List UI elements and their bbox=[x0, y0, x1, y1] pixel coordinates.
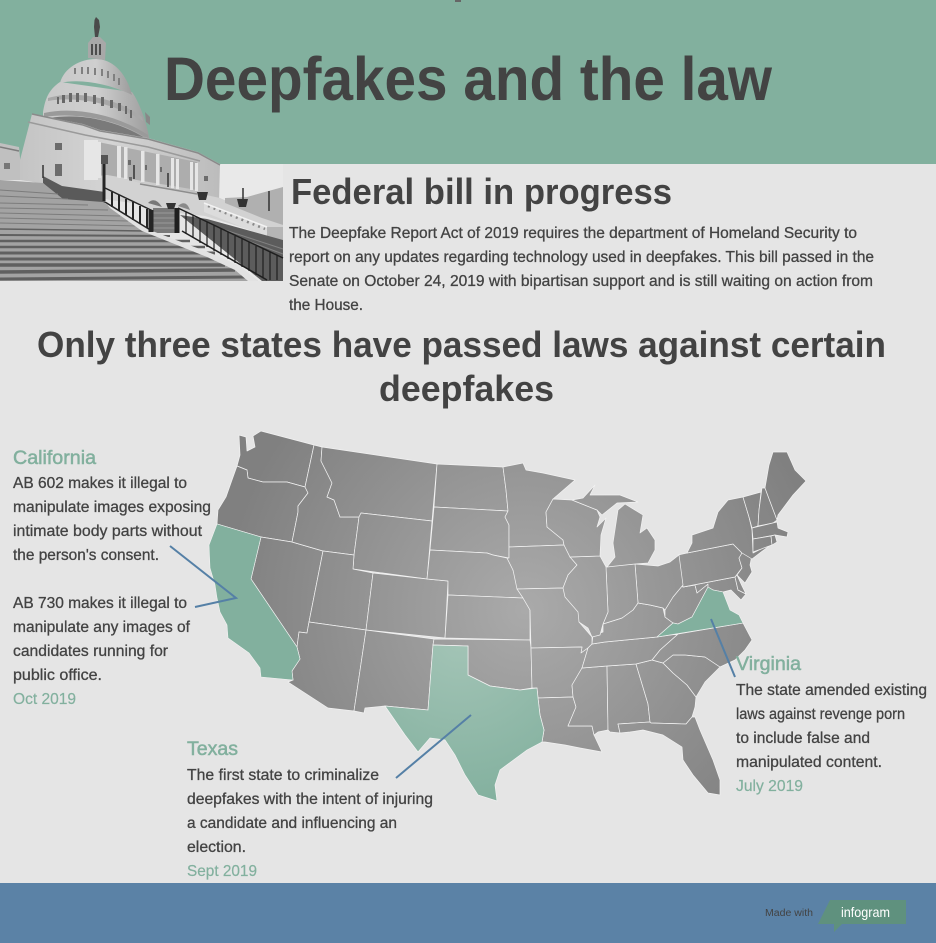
California text: public office. bbox=[13, 667, 102, 684]
Texas date: Sept 2019 bbox=[187, 863, 257, 880]
OK bbox=[433, 639, 532, 690]
IL bbox=[563, 556, 608, 637]
lamp posts bbox=[43, 165, 269, 211]
top edge mark bbox=[455, 0, 461, 2]
Virginia date: July 2019 bbox=[736, 778, 803, 795]
callout: California bbox=[13, 448, 211, 708]
left wing bbox=[0, 143, 22, 180]
sky patch bbox=[220, 164, 283, 281]
VT bbox=[743, 492, 761, 528]
California text: manipulate images exposing bbox=[13, 499, 211, 516]
colonnade band bbox=[50, 116, 143, 143]
Virginia highlight bbox=[657, 587, 743, 637]
LA bbox=[538, 697, 602, 752]
CO bbox=[366, 573, 448, 638]
text block: federal bill description bbox=[289, 225, 874, 314]
AR bbox=[531, 647, 588, 698]
columns bbox=[84, 140, 198, 191]
MI lower bbox=[607, 504, 655, 567]
windows bbox=[55, 143, 208, 182]
text block: federal bill description: report on any updates regarding technology used in deepfakes. This bill passed in the bbox=[289, 249, 874, 266]
callout: Texas bbox=[187, 739, 433, 880]
text block: federal bill description: Senate on October 24, 2019 with bipartisan support and is still waiting on action from bbox=[289, 273, 873, 290]
title: Deepfakes and the law bbox=[164, 45, 773, 113]
California highlight bbox=[209, 524, 300, 680]
NJ bbox=[737, 553, 752, 583]
arches bbox=[148, 200, 162, 207]
footer credit bbox=[765, 900, 906, 932]
MO bbox=[517, 588, 592, 653]
NY bbox=[687, 497, 773, 559]
KS bbox=[445, 595, 530, 640]
Virginia text: manipulated content. bbox=[736, 754, 882, 771]
TN bbox=[582, 634, 678, 668]
text block: federal bill description: the House. bbox=[289, 297, 363, 314]
Virginia name: Virginia bbox=[736, 654, 801, 675]
dome cap bbox=[60, 59, 132, 95]
NM bbox=[354, 630, 434, 713]
AL bbox=[607, 664, 650, 733]
right balustrade bbox=[204, 203, 267, 237]
heading: three states: deepfakes bbox=[379, 368, 554, 409]
California text: intimate body parts without bbox=[13, 523, 203, 540]
ME bbox=[765, 452, 806, 520]
infogram wordmark: infogram bbox=[841, 904, 890, 920]
snow on steps bbox=[106, 203, 258, 281]
California name: California bbox=[13, 448, 96, 469]
Virginia text bbox=[736, 682, 927, 771]
Texas text: The first state to criminalize bbox=[187, 767, 379, 784]
side staircase bbox=[180, 215, 283, 281]
left dark stair bbox=[43, 176, 105, 203]
California text: AB 602 makes it illegal to bbox=[13, 475, 187, 492]
heading: three states bbox=[37, 324, 886, 409]
California text: AB 730 makes it illegal to bbox=[13, 595, 187, 612]
GA bbox=[636, 660, 696, 724]
arrow: Texas bbox=[396, 715, 471, 778]
PA bbox=[678, 544, 742, 587]
main steps bbox=[0, 180, 258, 281]
ID bbox=[292, 445, 359, 555]
MI upper bbox=[572, 485, 638, 515]
WI bbox=[546, 499, 606, 557]
centre railing bbox=[104, 158, 153, 232]
header band bbox=[0, 0, 936, 164]
Texas text: deepfakes with the intent of injuring bbox=[187, 791, 433, 808]
text block: federal bill description: The Deepfake Report Act of 2019 requires the department of Homeland Security to bbox=[289, 225, 857, 242]
NC bbox=[652, 623, 752, 667]
portico shade bbox=[98, 142, 197, 190]
FL bbox=[618, 717, 720, 795]
Texas text: election. bbox=[187, 839, 246, 856]
California text bbox=[13, 475, 211, 684]
California date: Oct 2019 bbox=[13, 691, 76, 708]
MN bbox=[503, 463, 575, 547]
RI bbox=[771, 535, 777, 545]
infogram badge bbox=[818, 900, 906, 932]
UT bbox=[309, 551, 373, 630]
MT bbox=[321, 447, 437, 521]
WA bbox=[237, 431, 314, 487]
lamp bbox=[101, 155, 108, 164]
Virginia text: to include false and bbox=[736, 730, 870, 747]
photo: US Capitol bbox=[0, 17, 283, 281]
OH bbox=[635, 555, 683, 610]
heading: three states: Only three states have passed laws against certain bbox=[37, 324, 886, 365]
Texas text: a candidate and influencing an bbox=[187, 815, 397, 832]
background building bbox=[225, 187, 283, 225]
flag bbox=[145, 112, 150, 125]
Virginia text: laws against revenge porn bbox=[736, 706, 905, 723]
statue bbox=[94, 17, 100, 37]
CT bbox=[753, 536, 772, 552]
DE bbox=[735, 575, 746, 594]
SC bbox=[663, 655, 720, 697]
dome drum bbox=[43, 82, 150, 150]
MD bbox=[683, 577, 746, 600]
lantern bbox=[88, 37, 106, 60]
centre flight bbox=[153, 208, 176, 233]
arrow: California bbox=[170, 546, 236, 607]
NE bbox=[427, 550, 523, 598]
Texas highlight bbox=[385, 645, 544, 801]
ND bbox=[434, 464, 508, 511]
map of the United States bbox=[217, 431, 806, 795]
main building bbox=[20, 114, 220, 212]
MS bbox=[568, 666, 608, 735]
California text: candidates running for bbox=[13, 643, 169, 660]
MA bbox=[752, 522, 788, 539]
NH bbox=[758, 488, 777, 526]
urns bbox=[166, 192, 248, 209]
California text: the person's consent. bbox=[13, 547, 159, 564]
NV bbox=[251, 537, 323, 647]
Texas text bbox=[187, 767, 433, 856]
AZ bbox=[288, 622, 366, 711]
footer band bbox=[0, 883, 936, 943]
Virginia text: The state amended existing bbox=[736, 682, 927, 699]
SD bbox=[430, 507, 509, 558]
Texas name: Texas bbox=[187, 739, 238, 760]
arrow: Virginia bbox=[711, 619, 735, 677]
heading: Federal bill in progress: Federal bill in progress bbox=[291, 171, 672, 212]
callout: Virginia bbox=[736, 654, 927, 795]
terrace bbox=[105, 175, 283, 240]
OR bbox=[217, 466, 308, 542]
made with label: Made with bbox=[765, 908, 813, 919]
drum windows bbox=[57, 93, 132, 118]
right railing bbox=[177, 208, 283, 280]
KY bbox=[592, 603, 673, 644]
WV bbox=[665, 584, 708, 624]
WY bbox=[353, 513, 432, 579]
California text: manipulate any images of bbox=[13, 619, 191, 636]
IN bbox=[603, 564, 638, 624]
IA bbox=[507, 545, 577, 589]
